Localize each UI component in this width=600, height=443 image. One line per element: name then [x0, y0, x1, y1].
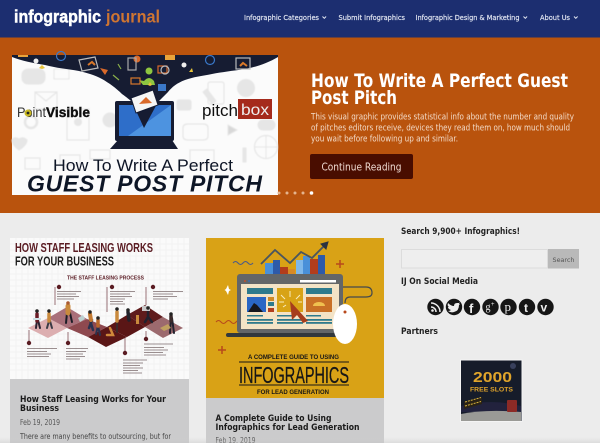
social media icons: v: [540, 300, 548, 314]
logo: PointVisible: Point: [17, 104, 46, 120]
card caption: lead generation: [206, 398, 384, 443]
navigation menu: [244, 13, 578, 22]
card caption: lead generation: Infographics for Lead Generation: [216, 423, 360, 433]
search box: [402, 249, 579, 268]
sidebar: [401, 227, 579, 422]
infographic heading: HOW STAFF LEASING WORKS: [15, 241, 153, 255]
continue reading button: Continue Reading: [322, 162, 402, 174]
step callouts: [27, 285, 183, 373]
social media icons: p: [504, 299, 511, 314]
social media icons: g: [486, 302, 490, 313]
card image: lead generation: [206, 238, 384, 399]
logo: pitchbox: pitch: [202, 101, 238, 120]
ghost background icons: [12, 69, 278, 169]
card caption: staff leasing: How Staff Leasing Works for Your: [20, 395, 166, 405]
continue reading button: [310, 154, 413, 179]
infographic title text: [239, 354, 349, 396]
infographic heading: [15, 241, 153, 282]
slider dots: [278, 191, 313, 195]
funnel doodles: [18, 52, 250, 91]
logo: [14, 7, 160, 27]
logo: infographic: [14, 7, 101, 27]
partners heading: Partners: [401, 327, 438, 337]
logo: journal: [105, 7, 160, 27]
bar chart with arrow: [216, 242, 344, 354]
bottom fade: [0, 437, 600, 443]
dark funnel with icons: [12, 55, 278, 128]
partner ad: free slots: FREE SLOTS: [470, 388, 513, 394]
step text lines: [27, 292, 183, 373]
navigation menu: Submit Infographics: [338, 13, 405, 22]
partner ad: free slots: 2000: [473, 369, 512, 386]
social media icons: +: [491, 302, 495, 308]
search box: Search: [552, 256, 574, 264]
partner ad: free slots: [460, 360, 522, 422]
card caption: staff leasing: [10, 379, 189, 443]
navigation menu: About Us: [540, 13, 570, 22]
infographic heading: THE STAFF LEASING PROCESS: [67, 276, 145, 282]
card: staff leasing: [10, 238, 189, 443]
hero description: you wait before following up and similar.: [311, 134, 458, 144]
icon: laptop: [110, 90, 178, 149]
infographic title text: INFOGRAPHICS: [239, 362, 349, 388]
infographic heading: FOR YOUR BUSINESS: [15, 254, 114, 268]
zigzag process diagram: [28, 305, 183, 347]
search heading: Search 9,900+ Infographics!: [401, 227, 520, 237]
card caption: staff leasing: There are many benefits to outsourcing, but for: [19, 432, 172, 441]
hero title: Post Pitch: [311, 87, 397, 109]
navigation menu: Infographic Categories: [244, 13, 319, 22]
hero image: [12, 52, 278, 196]
hero banner: [0, 38, 600, 213]
logo: PointVisible: Visible: [46, 104, 90, 120]
people figures: [33, 301, 174, 335]
header bar: [0, 0, 600, 38]
hero image headline: How To Write A Perfect: [53, 156, 233, 175]
navigation menu: Infographic Design & Marketing: [416, 13, 520, 22]
social media icons: f: [469, 301, 474, 316]
logo: PointVisible: [17, 104, 90, 120]
card caption: staff leasing: Business: [20, 404, 59, 414]
card: lead generation: [206, 238, 384, 443]
card image: staff leasing: [10, 238, 189, 379]
icon: laptop with browser: [226, 274, 372, 344]
card caption: lead generation: A Complete Guide to Using: [216, 414, 332, 424]
social media icons: t: [524, 301, 528, 315]
infographic title text: FOR LEAD GENERATION: [257, 389, 329, 396]
logo: pitchbox: box: [241, 102, 269, 119]
card caption: staff leasing: Feb 19, 2019: [20, 418, 60, 427]
infographic title text: A COMPLETE GUIDE TO USING: [248, 354, 339, 361]
hero image headline: [27, 156, 262, 196]
social media icons: [427, 299, 554, 316]
social media heading: IJ On Social Media: [401, 277, 478, 287]
logo: pitchbox: [202, 99, 272, 120]
graph grid: [10, 238, 189, 379]
hero image headline: GUEST POST PITCH: [27, 170, 262, 196]
